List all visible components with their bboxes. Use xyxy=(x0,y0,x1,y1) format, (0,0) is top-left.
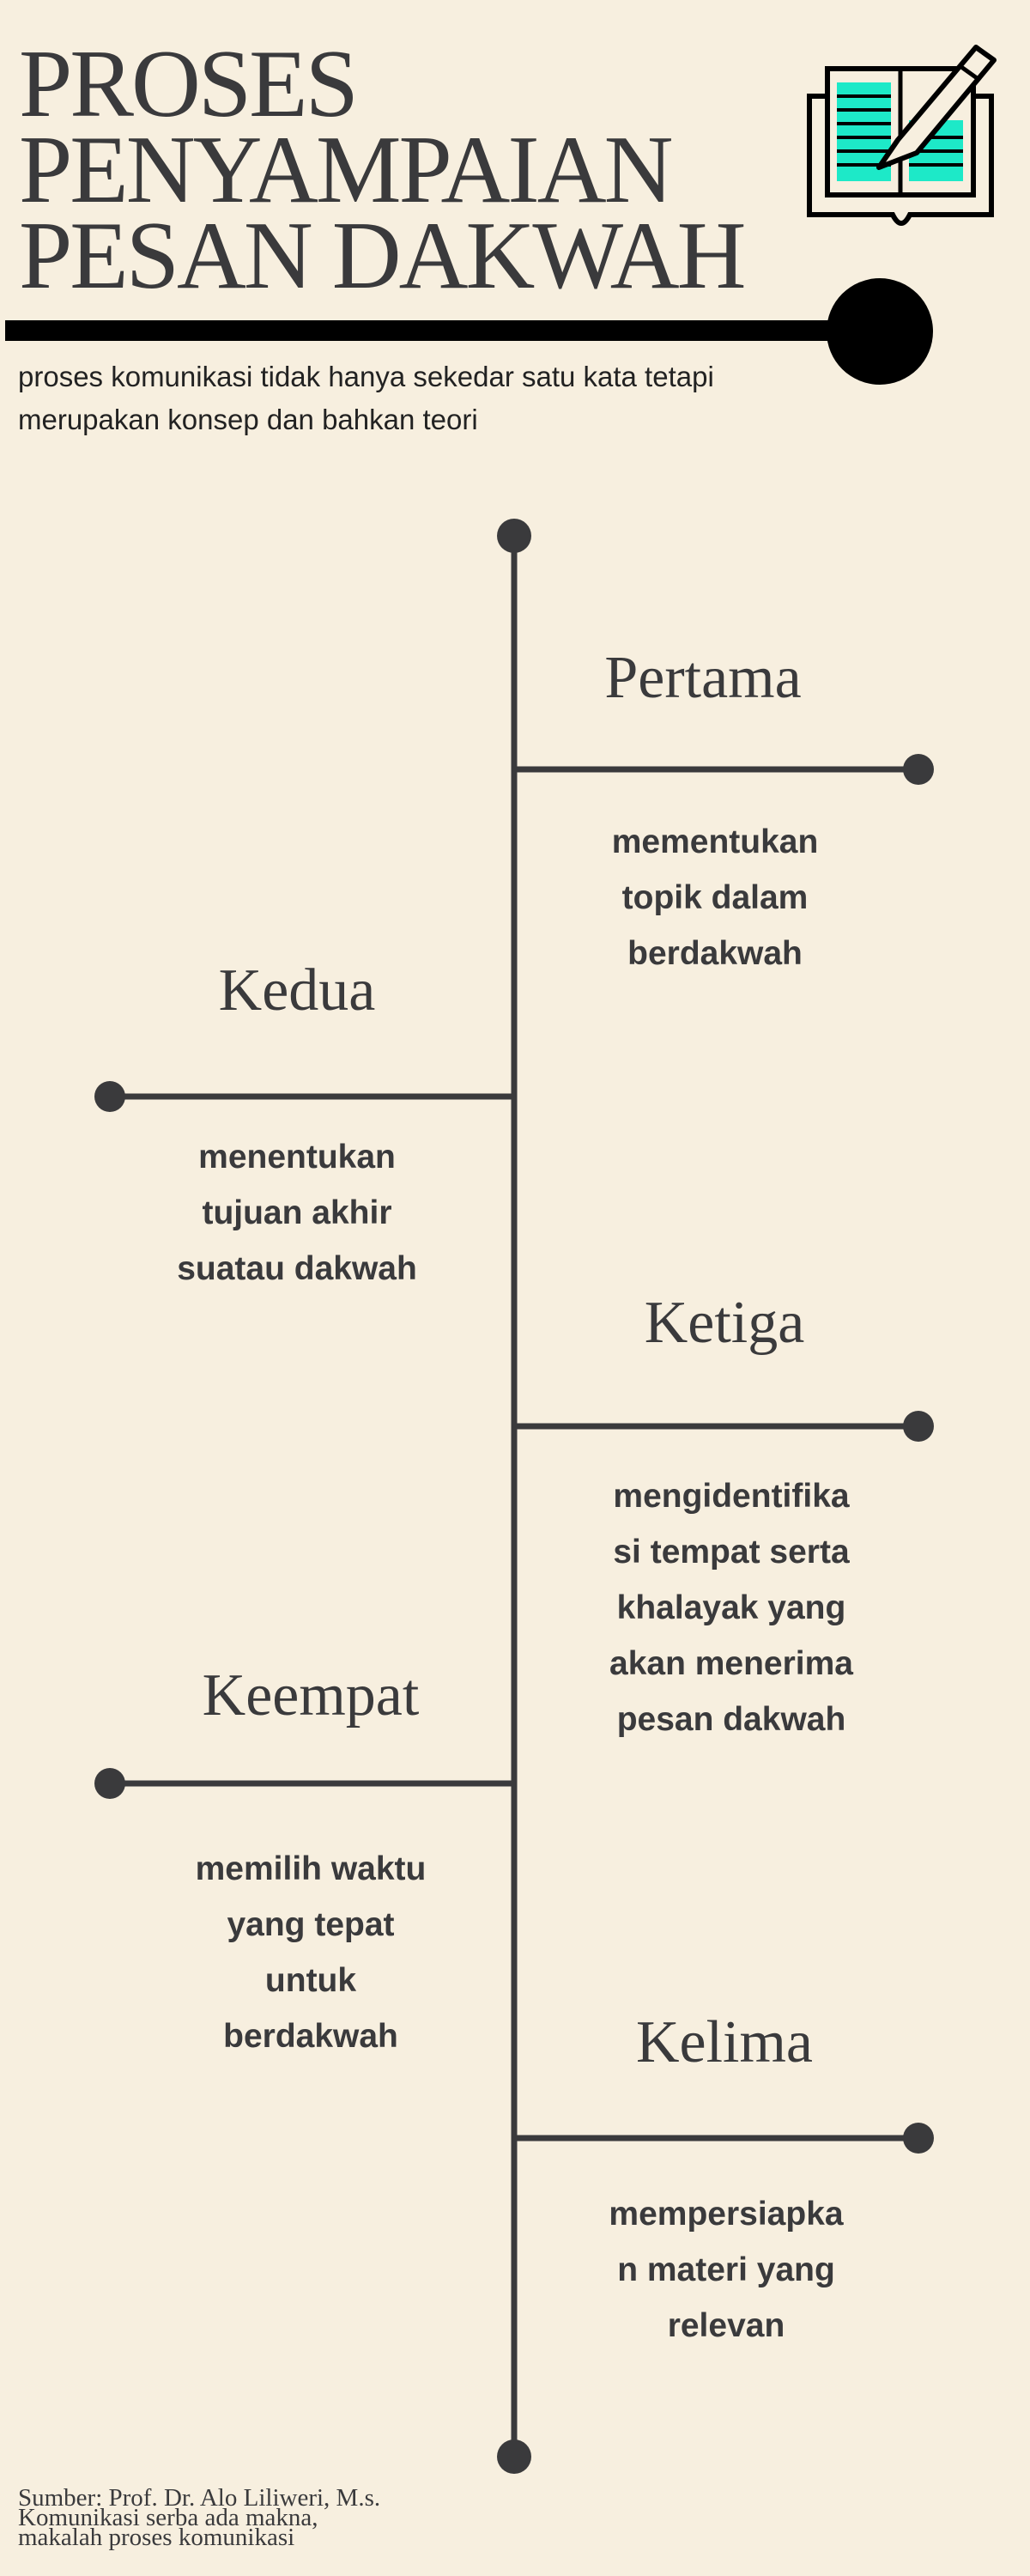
source footer: Komunikasi serba ada makna, xyxy=(18,2504,318,2531)
step 5 text xyxy=(609,2196,844,2344)
title: PESAN DAKWAH xyxy=(19,203,743,309)
source footer xyxy=(18,2484,380,2551)
title bar with circle xyxy=(5,278,933,385)
title: PENYAMPAIAN xyxy=(19,117,670,223)
step 4 text: berdakwah xyxy=(223,2018,398,2055)
step 3 text: mengidentifika xyxy=(613,1478,850,1515)
step 2 text: suatau dakwah xyxy=(177,1250,417,1287)
step 3 text: khalayak yang xyxy=(617,1589,845,1626)
title: PROSES xyxy=(19,31,356,137)
step 2 text: menentukan xyxy=(198,1139,396,1176)
subtitle: merupakan konsep dan bahkan teori xyxy=(18,404,478,435)
step 2 text xyxy=(177,1139,417,1287)
step 3 text: si tempat serta xyxy=(613,1534,850,1571)
step 3 text: akan menerima xyxy=(609,1645,853,1682)
step 5 text: n materi yang xyxy=(617,2251,835,2288)
step 2 heading: Kedua xyxy=(219,957,375,1024)
step 4 text: memilih waktu xyxy=(196,1850,426,1887)
source footer: makalah proses komunikasi xyxy=(18,2524,294,2551)
step 3 text: pesan dakwah xyxy=(617,1701,845,1738)
step 3 heading: Ketiga xyxy=(645,1290,804,1356)
source footer: Sumber: Prof. Dr. Alo Liliweri, M.s. xyxy=(18,2484,380,2512)
step 1 text: mementukan xyxy=(612,823,818,860)
step 4 text: yang tepat xyxy=(227,1906,395,1943)
title xyxy=(19,31,743,309)
step 1 text xyxy=(612,823,818,972)
step 4 text: untuk xyxy=(265,1962,356,1999)
subtitle xyxy=(18,361,714,435)
step 3 text xyxy=(609,1478,853,1738)
step 2 text: tujuan akhir xyxy=(202,1194,392,1231)
step 1 heading: Pertama xyxy=(604,645,802,711)
icon: book and pencil xyxy=(807,45,997,226)
step 5 text: mempersiapka xyxy=(609,2196,844,2233)
step 1 text: berdakwah xyxy=(627,935,803,972)
step 4 text xyxy=(196,1850,426,2055)
step 5 text: relevan xyxy=(668,2307,785,2344)
step 5 heading: Kelima xyxy=(636,2009,813,2075)
subtitle: proses komunikasi tidak hanya sekedar satu kata tetapi xyxy=(18,361,714,392)
step 4 heading: Keempat xyxy=(203,1662,419,1728)
step 1 text: topik dalam xyxy=(622,879,808,916)
